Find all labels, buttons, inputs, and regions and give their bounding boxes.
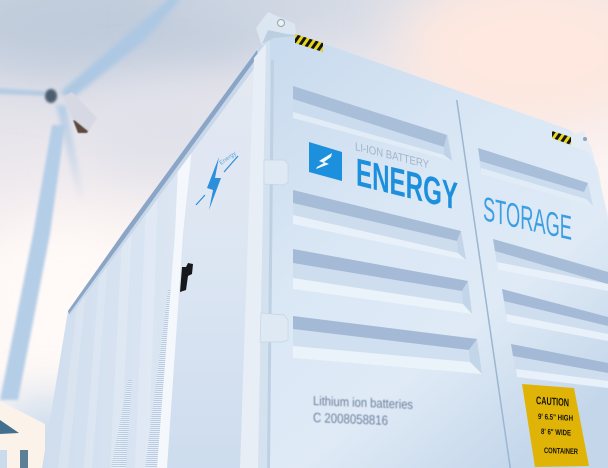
caution label: CAUTION (536, 395, 569, 409)
corner casting top (256, 12, 296, 46)
recess panel right 4 (511, 344, 608, 388)
wind turbine (0, 0, 180, 400)
turbine blade down (56, 105, 86, 205)
recess panel right 2 (493, 239, 608, 291)
door white edge strip (157, 148, 192, 468)
label: lithium ion batteries: Lithium ion batteries (313, 393, 413, 412)
label: lithium ion batteries: C 2008058816 (313, 410, 388, 428)
caution label: 8' 6" WIDE (541, 427, 571, 438)
recess panel left 3 (293, 249, 472, 314)
hinge upper (264, 160, 288, 185)
ribbed strips (111, 290, 172, 468)
caution label: 9' 6.5" HIGH (538, 412, 573, 423)
front wall (268, 34, 608, 468)
corner post (240, 36, 272, 468)
caution label: CONTAINER (544, 446, 578, 456)
recess panel right 3 (502, 289, 608, 341)
hinge lower (260, 313, 288, 342)
label: energy: ENERGY (356, 151, 458, 219)
door seam (456, 100, 511, 468)
door handle (180, 263, 193, 292)
recess panel right 1 (478, 148, 593, 206)
side lightning logo (196, 151, 238, 210)
blue bolt icon square (309, 142, 342, 181)
side door (165, 62, 255, 468)
label: li-ion battery: LI-ION BATTERY (355, 140, 429, 171)
door frame line (267, 60, 274, 468)
corner casting right (571, 132, 608, 225)
hazard sticker right (552, 131, 571, 145)
recess panel left 2 (293, 190, 466, 260)
side wall (42, 42, 262, 468)
caution label (522, 384, 589, 467)
turbine blade up-right (60, 0, 180, 100)
ground building (0, 401, 45, 468)
roof rail (68, 30, 270, 316)
turbine tower (0, 125, 65, 400)
turbine blade left (0, 88, 45, 96)
turbine nacelle (64, 92, 97, 133)
turbine hub (45, 89, 57, 103)
side lightning logo: Energy (219, 151, 238, 167)
label: lithium ion batteries (313, 393, 413, 428)
side wall corrugations (58, 190, 158, 468)
recess panel left 4 (293, 316, 482, 374)
hazard sticker left (295, 34, 323, 52)
recess panel left 1 (293, 86, 452, 161)
